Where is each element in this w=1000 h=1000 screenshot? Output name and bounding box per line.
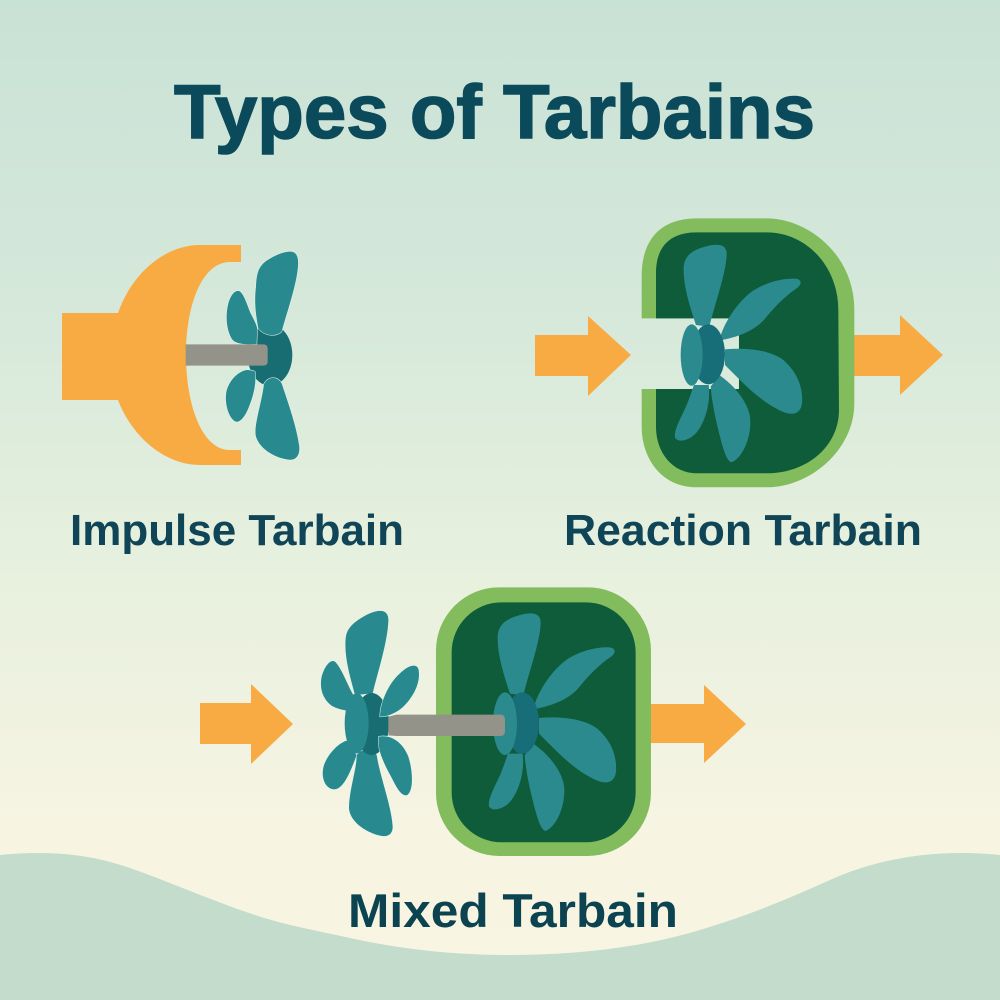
arrow: mixed inflow <box>200 684 293 764</box>
bottom wave <box>0 853 1000 1000</box>
arrow: reaction inflow <box>535 316 631 396</box>
label: reaction: Reaction Tarbain <box>564 506 922 555</box>
panel: impulse turbine <box>62 245 404 555</box>
icon: reaction housing and rotor <box>642 218 854 487</box>
icon: mixed housing, rotors and shaft <box>321 587 651 856</box>
arrow: reaction outflow <box>850 315 943 395</box>
panel: mixed turbine <box>200 587 746 937</box>
label: mixed: Mixed Tarbain <box>348 884 678 937</box>
icon: impulse nozzle and bucket <box>62 245 241 465</box>
icon: impulse rotor <box>186 252 299 460</box>
panel: reaction turbine <box>535 218 943 555</box>
label: impulse: Impulse Tarbain <box>70 506 404 555</box>
arrow: mixed outflow <box>650 685 746 763</box>
title: Types of Tarbains <box>174 70 815 155</box>
